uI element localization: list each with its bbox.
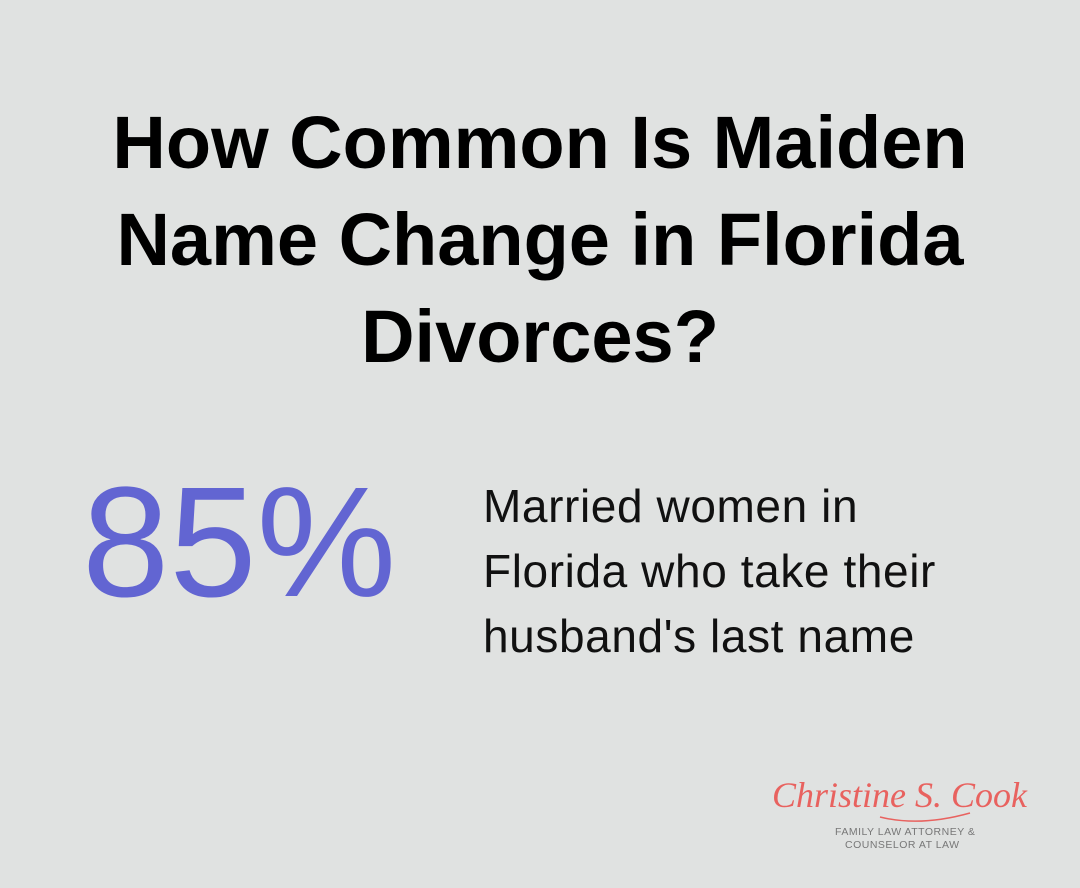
title: How Common Is Maiden [112, 101, 968, 184]
title: Divorces? [361, 295, 719, 378]
logo: COUNSELOR AT LAW [845, 839, 960, 851]
logo: FAMILY LAW ATTORNEY & [835, 826, 975, 838]
description text: Married women in [483, 480, 858, 532]
description text [483, 480, 936, 662]
description text: husband's last name [483, 610, 915, 662]
title: Name Change in Florida [116, 198, 964, 281]
description text: Florida who take their [483, 545, 936, 597]
logo [772, 775, 1028, 851]
big statistic: 85% [82, 455, 396, 630]
logo: Christine S. Cook [772, 775, 1028, 815]
title [112, 101, 968, 378]
